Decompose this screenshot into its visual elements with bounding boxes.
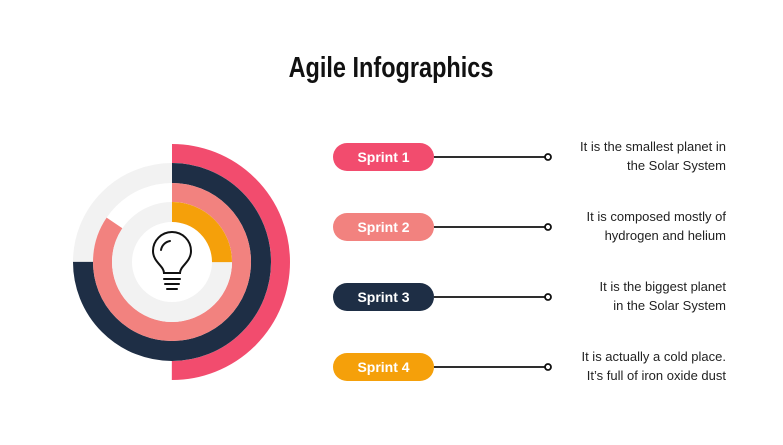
sprint 3 row: [333, 279, 726, 313]
sprint 3 row: Sprint 3: [357, 289, 410, 305]
title: Agile Infographics: [289, 51, 493, 84]
sprint 4 row: Sprint 4: [357, 359, 410, 375]
sprint 2 row: Sprint 2: [357, 219, 410, 235]
icon: light bulb: [153, 232, 191, 289]
sprint 1 row: [333, 139, 726, 173]
sprint 1 row: the Solar System: [627, 158, 726, 173]
sprint 2 row: It is composed mostly of: [587, 209, 726, 224]
sprint 4 row: It is actually a cold place.: [581, 349, 726, 364]
sprint 2 row: [333, 209, 726, 243]
sprint 4 row: [333, 349, 726, 383]
sprint 2 row: hydrogen and helium: [605, 228, 726, 243]
sprint 3 row: It is the biggest planet: [600, 279, 726, 294]
sprint 3 row: in the Solar System: [613, 298, 726, 313]
sprint 1 row: It is the smallest planet in: [580, 139, 726, 154]
sprint 4 row: It’s full of iron oxide dust: [587, 368, 726, 383]
radial chart: [64, 154, 280, 370]
sprint 1 row: Sprint 1: [357, 149, 410, 165]
